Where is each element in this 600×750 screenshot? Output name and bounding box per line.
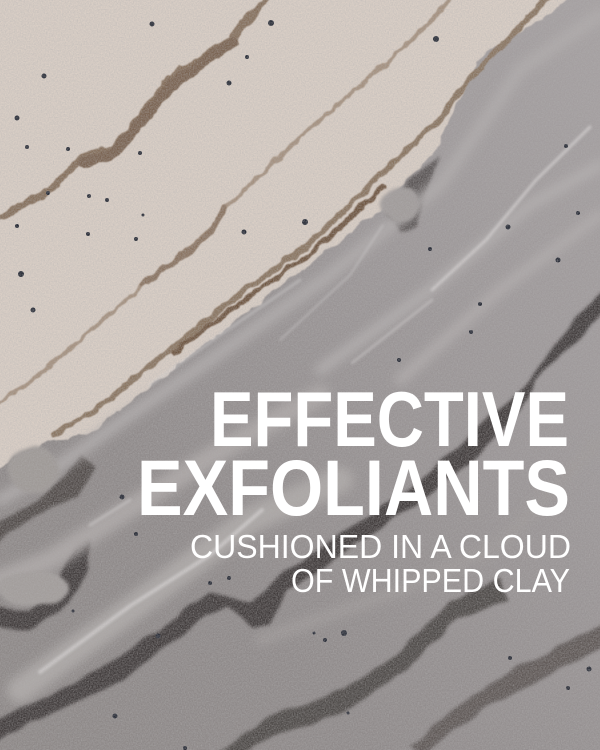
dark shadow: central crevice [0, 290, 600, 748]
dark shadow: left lobe [0, 537, 90, 630]
dark shadow: clay drop [385, 155, 440, 232]
subtitle: CUSHIONED IN A CLOUD [190, 528, 571, 565]
dark shadow: bottom band [410, 615, 600, 750]
beige clay ridges [0, 0, 555, 435]
subtitle [190, 528, 571, 599]
clay blobs [0, 188, 419, 606]
glossy highlights [40, 127, 590, 672]
subtitle: OF WHIPPED CLAY [291, 562, 570, 599]
title [137, 375, 570, 532]
background: beige clay [0, 0, 600, 490]
dark shadow: upper left lobe [0, 452, 95, 550]
dark shadow: lower band [205, 578, 510, 750]
grey clay shadows [0, 155, 600, 750]
